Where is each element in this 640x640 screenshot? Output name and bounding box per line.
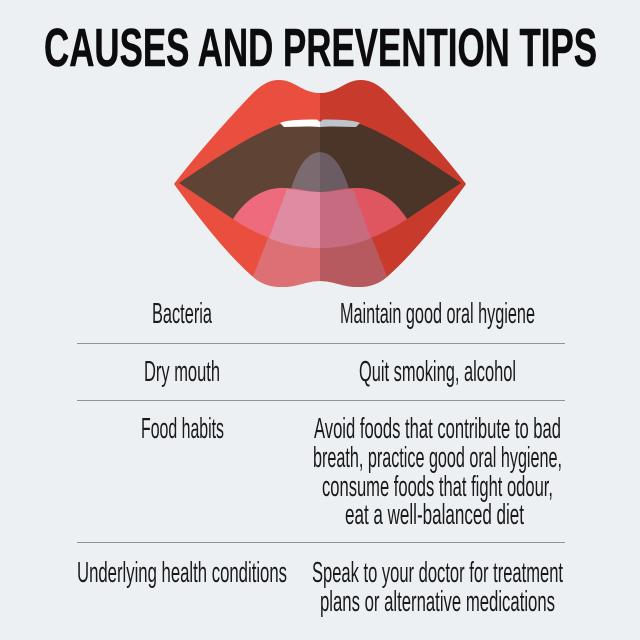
illustration: open mouth [170,75,470,290]
row: food habits: Food habits [141,413,224,445]
lips [170,75,470,290]
divider lines [77,343,565,543]
row: dry mouth: Dry mouth [144,356,220,388]
row: underlying health conditions [77,557,563,618]
row: dry mouth [144,356,516,388]
row: dry mouth: Quit smoking, alcohol [359,356,516,388]
row: bacteria [152,298,535,330]
row: food habits [141,413,562,531]
row: bacteria: Bacteria [152,298,212,330]
lower lip tongue overlay [252,238,320,290]
row: underlying health conditions: Underlying health conditions [77,557,287,589]
uvula [291,152,320,193]
mouth interior [179,124,320,230]
teeth [280,120,320,127]
tongue [233,188,320,248]
